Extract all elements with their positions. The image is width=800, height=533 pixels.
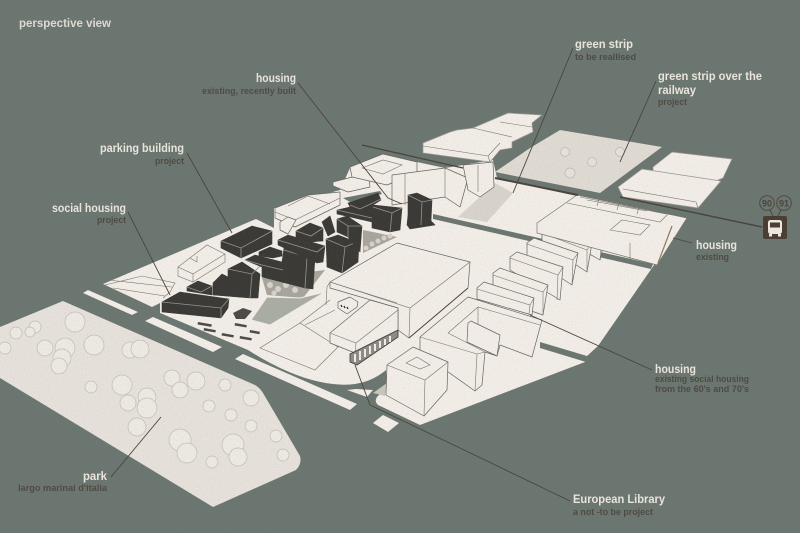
label: housing recently built: housing [256,71,296,85]
label: green strip: to be reallised [575,52,636,63]
small cube [338,297,358,314]
label: social housing: project [97,215,127,226]
small dark block [187,281,212,295]
label: European Library [573,492,665,518]
label: green strip over the railway [658,69,762,108]
parked cars [198,308,260,341]
large building [330,243,470,338]
label: green strip: green strip [575,37,633,51]
label: green strip over the railway: green strip over the [658,69,762,83]
plaza lines [260,300,340,370]
L-shaped block [245,248,315,289]
dark tower [407,193,435,229]
existing social housing bars [477,216,607,315]
road islands [83,290,399,432]
park [0,301,300,507]
label: housing recently built [202,71,297,97]
European Library building [326,282,398,365]
square pond [251,292,325,325]
white building on left site [105,245,225,298]
label: housing social: housing [655,362,696,376]
existing housing complex [537,195,687,265]
green strip over the railway [495,130,662,193]
label: European Library: a not -to be project [573,507,654,518]
dark project buildings [162,193,435,318]
label: social housing [52,201,127,226]
icon: bus stop 90 91 [760,196,791,239]
label: parking building: project [155,156,185,167]
label: European Library: European Library [573,492,665,506]
small angled block [322,216,335,236]
cube building [386,347,448,416]
long dark block [278,235,325,263]
right upper blocks [618,152,732,208]
U-shaped housing building [420,297,542,391]
top row existing buildings [423,113,542,162]
label: park [18,469,108,494]
green strip to be realised [458,183,513,222]
stepped block [337,193,402,232]
gray wedge [373,383,387,396]
green gaps [343,191,653,362]
railway line to bus stop [362,145,762,227]
leader lines [111,48,692,501]
title: perspective view [19,18,111,30]
label: parking building [100,141,185,167]
label: social housing: social housing [52,201,126,215]
small roof block [259,247,282,258]
ground plate [103,154,687,425]
label: parking building: parking building [100,141,184,155]
large dark block [326,235,359,273]
label: housing social: from the 60's and 70's [655,384,749,395]
icon: bus stop 90 91: 90 [762,198,772,208]
tall dark block [213,262,260,298]
label: green strip over the railway: project [658,97,688,108]
parking building [221,226,272,258]
label: housing existing: housing [696,238,737,252]
label: housing existing [696,238,737,263]
label: green strip [575,37,636,63]
park trees [0,312,289,468]
vegetation areas [262,230,397,298]
label: housing social [655,362,749,395]
label: housing social: existing social housing [655,374,749,385]
dark block centre [296,223,323,242]
label: housing existing: existing [696,252,729,263]
label: park: largo marinai d'italia [18,483,108,494]
angled tall block [337,216,362,252]
icon: bus stop 90 91: 91 [779,198,789,208]
label: park: park [83,469,107,483]
social housing building [162,292,229,318]
label: green strip over the railway: railway [658,83,696,97]
white buildings upper left [275,154,494,234]
label: housing recently built: existing, recently built [202,86,297,97]
